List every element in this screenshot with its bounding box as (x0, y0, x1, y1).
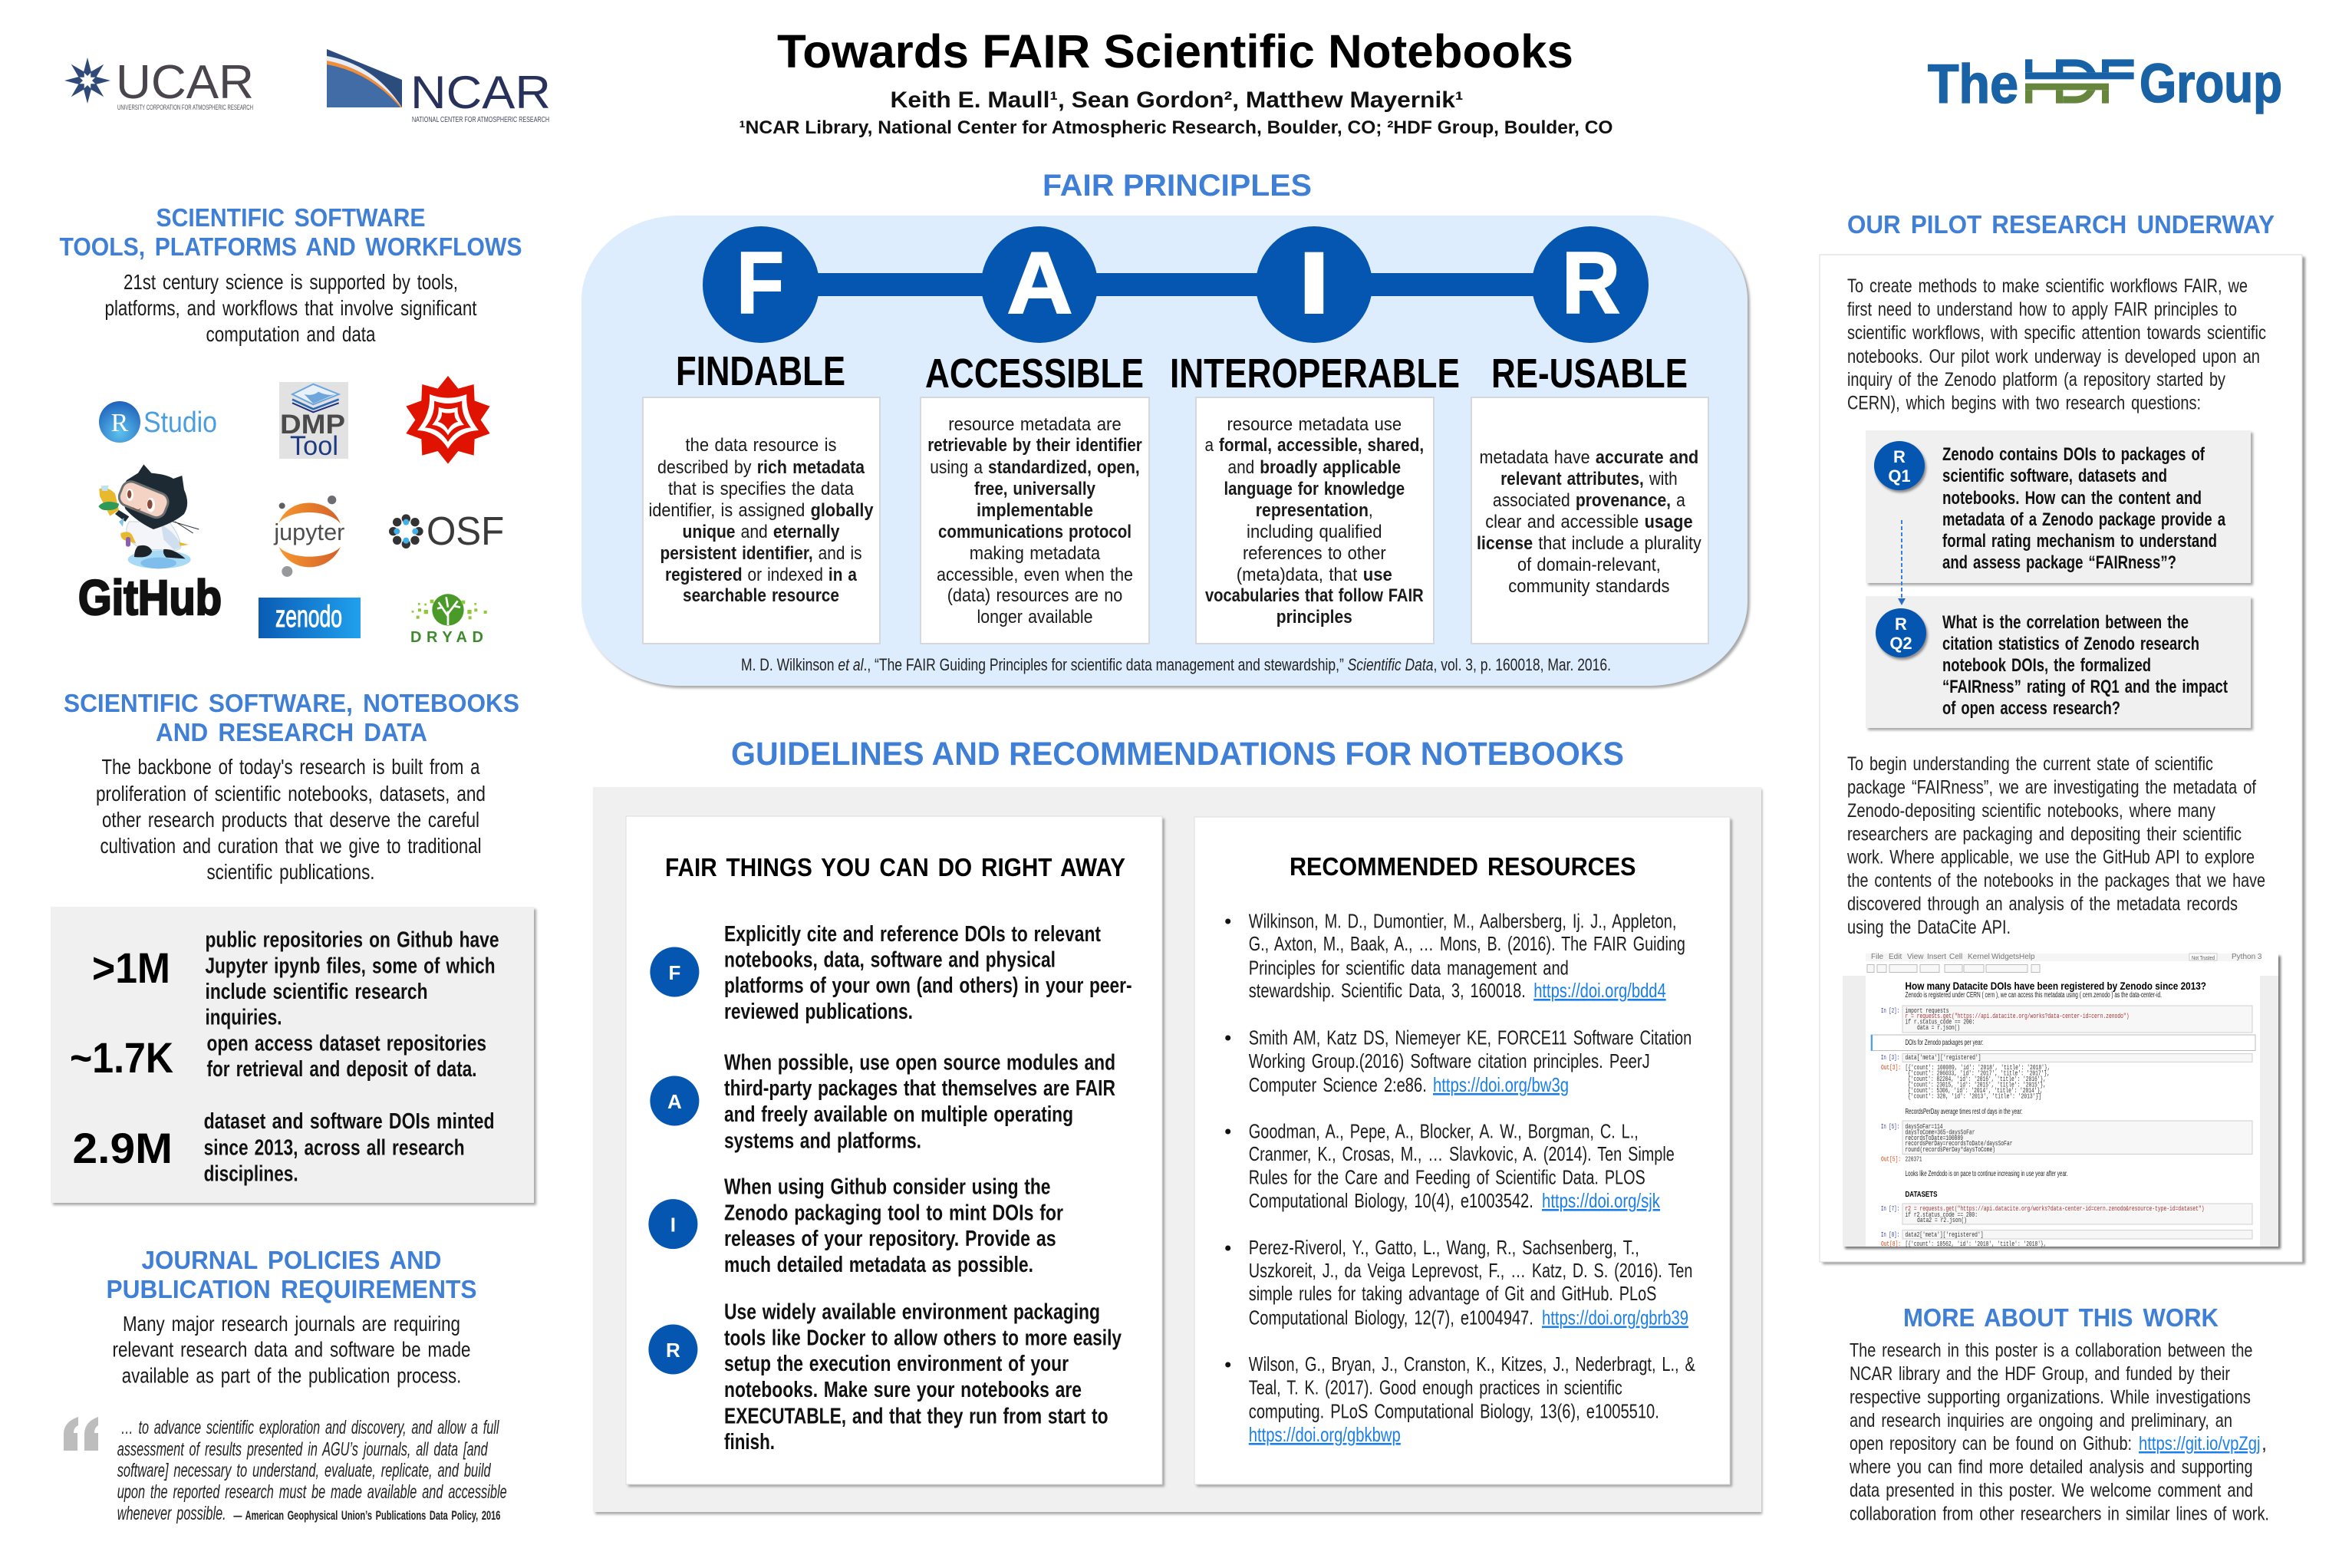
column: re-usable: relevant attributes, with (1500, 469, 1678, 489)
logo: DMPTool: Tool (290, 431, 338, 461)
callout: research question 1: formal rating mechanism to understand (1942, 531, 2217, 552)
text: pilot method: package “FAIRness”, we are investigating the metadata of (1847, 776, 2256, 798)
screenshot: Jupyter notebook: r = requests.get("https://api.datacite.org/works?data-center-id=cern.zenodo") (1906, 1013, 2130, 1020)
screenshot: Jupyter notebook: In [8]: (1881, 1231, 1899, 1239)
guideline: R: notebooks. Make sure your notebooks are (724, 1378, 1082, 1402)
reference: Wilson: https://doi.org/gbkbwp (1249, 1423, 1401, 1446)
stat: 2.9M DOIs: 2.9M (72, 1124, 173, 1172)
column: findable (643, 348, 880, 644)
column: interoperable: resource metadata use (1227, 414, 1402, 435)
title: Towards FAIR Scientific Notebooks (777, 25, 1573, 77)
logo: The HDF Group: The (1928, 54, 2018, 115)
panel: pilot research (1820, 255, 2305, 1264)
screenshot: Jupyter notebook: {'count': 23015, 'id': '2015', 'title': '2015'}, (1908, 1082, 2046, 1089)
reference: Perez-Riverol (1225, 1236, 1692, 1329)
column: interoperable: a formal, accessible, shared, (1204, 435, 1424, 456)
screenshot: Jupyter notebook: data = r.json() (1917, 1024, 1960, 1032)
authors: Keith E. Maull¹, Sean Gordon², Matthew Mayernik¹ (890, 87, 1464, 113)
column: interoperable: and broadly applicable (1228, 457, 1401, 478)
text: pilot intro: first need to understand how to apply FAIR principles to (1847, 299, 2237, 321)
quote: AGU policy: whenever possible. (117, 1503, 226, 1524)
diagram: FAIR connected circles (703, 226, 1649, 343)
reference: Goodman: Goodman, A., Pepe, A., Blocker, A. W., Borgman, C. L., (1249, 1120, 1639, 1143)
screenshot: Jupyter notebook: File (1871, 953, 1884, 961)
reference: Wilkinson: G., Axton, M., Baak, A., … Mons, B. (2016). The FAIR Guiding (1249, 932, 1685, 955)
screenshot: Jupyter notebook: Help (2019, 953, 2035, 961)
column: accessible: communications protocol (938, 522, 1132, 542)
column: interoperable: principles (1276, 607, 1352, 628)
quote: AGU policy: upon the reported research must be made available and accessible (117, 1481, 507, 1503)
callout: research question 2: citation statistics of Zenodo research (1942, 634, 2199, 654)
stat: over 1M repositories: public repositories on Github have (206, 928, 499, 953)
column: re-usable: RE-USABLE (1491, 351, 1688, 397)
screenshot: Jupyter notebook: DOIs for Zenodo packages per year: (1906, 1039, 1984, 1047)
screenshot: Jupyter notebook: {'count': 5306, 'id': '2014', 'title': '2014'}, (1908, 1087, 2043, 1095)
column: re-usable: license that include a plurality (1477, 533, 1701, 554)
logo: Dryad (410, 594, 487, 646)
logo: GitHub with octocat (78, 464, 222, 625)
stat: 1.7K dataset repositories: ~1.7K (70, 1033, 173, 1082)
guideline: R (648, 1300, 1122, 1454)
text: notebooks intro: scientific publications. (207, 860, 374, 884)
callout: research question 1: R (1893, 447, 1906, 466)
logo: RStudio (99, 401, 217, 443)
logo: GitHub with octocat: GitHub (78, 570, 222, 625)
reference: Goodman: Rules for the Care and Feeding of Scientific Data. PLOS (1249, 1166, 1645, 1189)
screenshot: Jupyter notebook: DOIs for Zenodo packages per year: (1906, 1039, 1984, 1047)
callout: research question 1: Q1 (1888, 466, 1911, 486)
text: notebooks intro: cultivation and curation that we give to traditional (100, 834, 482, 858)
logo: RStudio: R (111, 409, 129, 437)
reference: Perez-Riverol: Uszkoreit, J., da Veiga Leprevost, F., … Katz, D. S. (2016). Ten (1249, 1259, 1692, 1282)
stat: over 1M repositories (92, 928, 499, 1029)
reference: Smith: Computer Science 2:e86. (1249, 1073, 1427, 1096)
guideline: F: F (668, 961, 680, 984)
screenshot: Jupyter notebook: daysSoFar=114 (1906, 1123, 1942, 1131)
guideline: A: systems and platforms. (724, 1129, 921, 1154)
text: more about this work: data presented in this poster. We welcome comment and (1850, 1480, 2253, 1501)
text: tools intro: computation and data (206, 322, 376, 346)
text: more about this work: where you can find more detailed analysis and supporting (1849, 1456, 2252, 1477)
text: pilot intro: notebooks. Our pilot work underway is developed upon an (1847, 346, 2260, 367)
screenshot: Jupyter notebook: Out[3]: (1881, 1064, 1901, 1072)
guideline: A: and freely available on multiple operating (724, 1102, 1073, 1127)
guideline: F: Explicitly cite and reference DOIs to relevant (724, 922, 1101, 947)
screenshot: Jupyter notebook: In [5]: (1881, 1123, 1899, 1131)
callout: research question 1: metadata of a Zenodo package provide a (1942, 509, 2225, 530)
column: re-usable: associated provenance, a (1493, 490, 1685, 511)
stat: 1.7K dataset repositories (70, 1031, 486, 1082)
guideline: A (650, 1051, 1115, 1154)
callout: research question 2: of open access research? (1942, 698, 2120, 719)
text: tools intro: platforms, and workflows that involve significant (104, 296, 477, 320)
text: pilot method: discovered through an analysis of the metadata records (1847, 893, 2238, 914)
text: notebooks intro: proliferation of scientific notebooks, datasets, and (96, 782, 486, 805)
column: findable: registered or indexed in a (665, 565, 858, 585)
callout: research question 2: “FAIRness” rating of RQ1 and the impact (1942, 677, 2228, 697)
text: journal intro: available as part of the publication process. (122, 1364, 461, 1387)
guideline: I: much detailed metadata as possible. (724, 1253, 1033, 1277)
panel: guidelines and recommendations (593, 787, 1762, 1514)
citation: Wilkinson et al: M. D. Wilkinson et al., “The FAIR Guiding Principles for scientific data management and stewardship,” Scientific Data, vol. 3, p. 160018, Mar. 2016. (741, 655, 1611, 674)
diagram: FAIR connected circles: R (1562, 235, 1620, 332)
column: accessible: free, universally (974, 479, 1096, 499)
screenshot: Jupyter notebook: if r2.status_code == 200: (1906, 1211, 1978, 1219)
screenshot: Jupyter notebook: recordsToDate=100089 (1906, 1135, 1963, 1142)
heading: journal policies (106, 1246, 477, 1303)
column: findable: persistent identifier, and is (660, 543, 862, 564)
callout: research question 2: What is the correlation between the (1942, 612, 2189, 633)
stat: 2.9M DOIs: dataset and software DOIs minted (204, 1109, 495, 1134)
column: accessible: (data) resources are no (947, 585, 1122, 606)
callout: research question 2: notebook DOIs, the formalized (1942, 655, 2151, 676)
logo: NCAR: NCAR (410, 67, 551, 118)
icon: quotation mark (64, 1417, 98, 1451)
column: accessible: accessible, even when the (937, 565, 1133, 585)
column: re-usable (1471, 351, 1708, 644)
heading: guidelines: GUIDELINES AND RECOMMENDATIONS FOR NOTEBOOKS (731, 736, 1624, 772)
panel: journal policies (64, 1246, 507, 1524)
column: interoperable: (meta)data, that use (1237, 565, 1392, 585)
screenshot: Jupyter notebook: daysToCome=365-daysSoFar (1906, 1128, 1975, 1136)
logo: Wolfram star (406, 376, 490, 464)
column: accessible: using a standardized, open, (930, 457, 1140, 478)
text: pilot method: researchers are packaging and depositing their scientific (1847, 824, 2242, 845)
column: re-usable: clear and accessible usage (1485, 512, 1693, 532)
reference: Smith (1225, 1026, 1692, 1096)
reference: Wilkinson: stewardship. Scientific Data, 3, 160018. (1249, 979, 1526, 1002)
text: journal intro: Many major research journals are requiring (123, 1312, 460, 1336)
stat: 1.7K dataset repositories: for retrieval and deposit of data. (207, 1057, 477, 1082)
stat: 2.9M DOIs: disciplines. (204, 1161, 298, 1186)
screenshot: Jupyter notebook: data['meta']['registered'] (1906, 1054, 1981, 1062)
column: interoperable: vocabularies that follow FAIR (1205, 585, 1424, 606)
reference: Perez-Riverol: Computational Biology, 12(7), e1004947. (1249, 1306, 1533, 1329)
card: FAIR things you can do right away (626, 816, 1164, 1487)
card heading: RECOMMENDED RESOURCES (1290, 852, 1636, 881)
screenshot: Jupyter notebook (1843, 953, 2281, 1249)
logo: NCAR (327, 49, 551, 124)
affiliations: ¹NCAR Library, National Center for Atmospheric Research, Boulder, CO; ²HDF Group, Boulder, CO (740, 117, 1612, 138)
column: re-usable: metadata have accurate and (1480, 447, 1698, 468)
screenshot: Jupyter notebook: How many Datacite DOIs have been registered by Zenodo since 2013? (1906, 980, 2206, 992)
logo: Zenodo (259, 598, 361, 638)
text: more about this work: open repository can be found on Github: (1850, 1433, 2132, 1454)
screenshot: Jupyter notebook: Zenodo is registered under CERN ( cern ), we can access this metadata using ( cern.zenodo ) as the data-center-id. (1906, 991, 2162, 1000)
screenshot: Jupyter notebook: data2 = r2.json() (1917, 1217, 1967, 1224)
guideline: I (648, 1175, 1063, 1277)
guideline: R: setup the execution environment of your (724, 1352, 1069, 1376)
screenshot: Jupyter notebook: Edit (1889, 953, 1902, 961)
logo: The HDF Group: Group (2140, 54, 2282, 114)
panel: statistics (51, 907, 536, 1205)
callout: research question 1: and assess package “FAIRness”? (1942, 552, 2176, 573)
screenshot: Jupyter notebook: Looks like Zendodo is on pace to continue increasing in use year after year. (1906, 1170, 2068, 1178)
column: accessible: resource metadata are (948, 414, 1122, 435)
stat: over 1M repositories: Jupyter ipynb files, some of which (206, 954, 496, 979)
column: interoperable: INTEROPERABLE (1170, 351, 1460, 397)
column: interoperable: language for knowledge (1224, 479, 1405, 499)
guideline: F: platforms of your own (and others) in your peer- (724, 973, 1132, 998)
reference: Goodman: https://doi.org/sjk (1542, 1189, 1661, 1212)
screenshot: Jupyter notebook: r2 = requests.get("https://api.datacite.org/works?data-center-id=cern.zenodo&resource-type-id=dataset") (1906, 1205, 2205, 1213)
column: re-usable: of domain-relevant, (1517, 555, 1661, 575)
screenshot: Jupyter notebook: data2['meta']['registered'] (1906, 1231, 1984, 1239)
column: re-usable: community standards (1508, 576, 1669, 597)
logo: DMPTool: DMP (280, 410, 345, 440)
reference: Wilson: computing. PLoS Computational Biology, 13(6), e1005510. (1249, 1399, 1659, 1422)
panel: notebooks and research data (51, 689, 536, 1205)
text: more about this work: NCAR library and the HDF Group, and funded by their (1850, 1363, 2230, 1385)
heading: notebooks: SCIENTIFIC SOFTWARE, NOTEBOOKS (64, 689, 519, 717)
screenshot: Jupyter notebook: In [2]: (1881, 1007, 1899, 1015)
text: journal intro: relevant research data and software be made (112, 1338, 471, 1361)
guideline: F (650, 922, 1132, 1024)
logo: DMPTool (279, 382, 348, 461)
callout: research question 2: R (1895, 614, 1907, 634)
reference: Goodman: Cranmer, K., Crosas, M., … Slavkovic, A. (2014). Ten Simple (1249, 1142, 1675, 1165)
screenshot: Jupyter notebook: Python 3 (2232, 953, 2262, 961)
text: pilot intro: To create methods to make scientific workflows FAIR, we (1847, 275, 2248, 297)
screenshot: Jupyter notebook: Out[8]: (1881, 1240, 1901, 1248)
screenshot: Jupyter notebook: RecordsPerDay average times rest of days in the year: (1906, 1108, 2022, 1116)
column: accessible: longer available (977, 607, 1092, 628)
callout: research question 2: Q2 (1889, 634, 1912, 653)
logo: RStudio: Studio (143, 407, 217, 439)
stat: over 1M repositories: include scientific research (206, 980, 428, 1004)
guideline: R: R (666, 1339, 680, 1362)
guideline: I: I (670, 1214, 676, 1237)
heading: tools (60, 203, 522, 261)
quote: AGU policy: assessment of results presented in AGU’s journals, all data [and (117, 1439, 488, 1461)
screenshot: Jupyter notebook: Kernel (1968, 953, 1990, 961)
guideline: R: Use widely available environment packaging (724, 1300, 1100, 1324)
logo: UCAR: UCAR (116, 56, 254, 109)
logo: Jupyter: jupyter (273, 519, 344, 545)
screenshot: Jupyter notebook: [{'count': 10562, 'id': '2018', 'title': '2018'}, (1906, 1240, 2047, 1248)
column: interoperable: including qualified (1247, 522, 1382, 542)
screenshot: Jupyter notebook: In [3]: (1881, 1054, 1899, 1062)
text: tools intro: 21st century science is supported by tools, (124, 270, 458, 294)
quote: AGU policy: … to advance scientific exploration and discovery, and allow a full (121, 1417, 499, 1438)
column: interoperable (1170, 351, 1460, 644)
reference: Wilkinson: Wilkinson, M. D., Dumontier, M., Aalbersberg, Ij. J., Appleton, (1249, 910, 1676, 933)
guideline: R: EXECUTABLE, and that they run from start to (724, 1404, 1108, 1428)
text: pilot method: Zenodo-depositing scientific notebooks, where many (1847, 800, 2215, 822)
screenshot: Jupyter notebook: {'count': 328, 'id': '2013', 'title': '2013'}] (1908, 1092, 2041, 1100)
text: tools intro (104, 270, 477, 346)
logo: NCAR: NATIONAL CENTER FOR ATMOSPHERIC RESEARCH (412, 116, 549, 124)
heading: more about this work: MORE ABOUT THIS WORK (1903, 1303, 2219, 1332)
panel: FAIR principles (581, 216, 1750, 688)
callout: research question 1: notebooks. How can the content and (1942, 488, 2202, 509)
screenshot: Jupyter notebook: recordsPerDay=recordsToDate/daysSoFar (1906, 1140, 2013, 1148)
column: findable: described by rich metadata (657, 457, 865, 478)
column: accessible: retrievable by their identifier (927, 435, 1142, 456)
heading: FAIR principles: FAIR PRINCIPLES (1043, 169, 1312, 203)
callout: research question 1: scientific software, datasets and (1942, 466, 2167, 486)
logo: The HDF Group (1928, 54, 2282, 115)
text: pilot method: using the DataCite API. (1847, 917, 2011, 938)
guideline: A: A (667, 1090, 682, 1113)
column: accessible: implementable (977, 500, 1093, 521)
reference: Perez-Riverol: Perez-Riverol, Y., Gatto, L., Wang, R., Sachsenberg, T., (1249, 1236, 1639, 1259)
column: accessible: ACCESSIBLE (925, 351, 1144, 397)
stat: 2.9M DOIs (72, 1109, 495, 1186)
text: pilot intro: CERN), which begins with two research questions: (1847, 393, 2201, 414)
callout: research question 2 (1866, 596, 2253, 730)
guideline: A: third-party packages that themselves are FAIR (724, 1076, 1115, 1101)
logo: UCAR (64, 56, 254, 111)
text: more about this work: respective supporting organizations. While investigations (1850, 1387, 2251, 1408)
panel: scientific software tools (60, 203, 522, 646)
logo: Zenodo: zenodo (275, 600, 342, 634)
text: notebooks intro: The backbone of today's research is built from a (101, 755, 480, 779)
column: interoperable: representation, (1256, 500, 1373, 521)
logo: Dryad: DRYAD (410, 629, 483, 646)
reference: Perez-Riverol: https://doi.org/gbrb39 (1542, 1306, 1688, 1329)
logo: OSF (389, 509, 504, 554)
guideline: R: finish. (724, 1430, 775, 1454)
callout: research question 1 (1866, 430, 2253, 585)
text: pilot intro: inquiry of the Zenodo platform (a repository started by (1847, 369, 2225, 390)
reference: Wilson: Teal, T. K. (2017). Good enough practices in scientific (1249, 1376, 1622, 1399)
text: pilot method: work. Where applicable, we use the GitHub API to explore (1846, 847, 2255, 868)
screenshot: Jupyter notebook: {'count': 82204, 'id': '2016', 'title': '2016'}, (1908, 1076, 2046, 1083)
logo: Jupyter (273, 496, 344, 577)
screenshot: Jupyter notebook: Insert (1927, 953, 1946, 961)
quote: AGU policy: — American Geophysical Union’s Publications Data Policy, 2016 (233, 1508, 500, 1523)
stat: over 1M repositories: inquiries. (206, 1005, 282, 1029)
reference: Wilkinson (1225, 910, 1685, 1002)
screenshot: Jupyter notebook: [{'count': 100089, 'id': '2018', 'title': '2018'}, (1906, 1064, 2050, 1072)
screenshot: Jupyter notebook: Widgets (1991, 953, 2019, 961)
screenshot: Jupyter notebook: In [7]: (1881, 1205, 1899, 1213)
screenshot: Jupyter notebook: View (1907, 953, 1924, 961)
screenshot: Jupyter notebook: 220371 (1906, 1156, 1922, 1164)
screenshot: Jupyter notebook: round(recordsPerDay*daysToCome) (1906, 1146, 1995, 1154)
text: pilot method (1846, 753, 2265, 938)
column: findable: unique and eternally (683, 522, 840, 542)
heading: notebooks (64, 689, 519, 746)
diagram: FAIR connected circles: I (1298, 235, 1330, 332)
reference: Goodman: Computational Biology, 10(4), e1003542. (1249, 1189, 1533, 1212)
column: interoperable: references to other (1243, 543, 1386, 564)
heading: notebooks: AND RESEARCH DATA (156, 718, 427, 746)
reference: Wilson: Wilson, G., Bryan, J., Cranston, K., Kitzes, J., Nederbragt, L., & (1249, 1352, 1695, 1375)
text: more about this work (1849, 1339, 2269, 1525)
guideline: I: releases of your repository. Provide as (724, 1227, 1056, 1251)
stat: over 1M repositories: >1M (92, 944, 170, 992)
column: findable: identifier, is assigned globally (649, 500, 874, 521)
reference: Goodman (1225, 1120, 1675, 1212)
column: accessible (921, 351, 1149, 644)
arrow: RQ1 to RQ2 (1898, 520, 1906, 605)
heading: tools: SCIENTIFIC SOFTWARE (156, 203, 425, 232)
icon: octocat scientist (98, 464, 199, 568)
logo: UCAR: UNIVERSITY CORPORATION FOR ATMOSPHERIC RESEARCH (117, 104, 253, 111)
screenshot: Jupyter notebook: Not Trusted (2192, 956, 2215, 961)
text: journal intro (112, 1312, 471, 1387)
reference: Perez-Riverol: simple rules for taking advantage of Git and GitHub. PLoS (1249, 1282, 1656, 1305)
panel: more about this work (1849, 1303, 2269, 1525)
diagram: FAIR connected circles: A (1006, 235, 1072, 332)
heading: tools: TOOLS, PLATFORMS AND WORKFLOWS (60, 232, 522, 261)
screenshot: Jupyter notebook: import requests (1906, 1007, 1948, 1015)
heading: pilot research: OUR PILOT RESEARCH UNDERWAY (1847, 210, 2275, 239)
card heading: FAIR THINGS YOU CAN DO RIGHT AWAY (665, 853, 1125, 881)
screenshot: Jupyter notebook: Out[5]: (1881, 1156, 1901, 1164)
column: findable: searchable resource (683, 585, 839, 606)
quote: AGU policy: software] necessary to understand, evaluate, replicate, and build (117, 1460, 491, 1481)
reference: Smith: https://doi.org/bw3g (1433, 1073, 1569, 1096)
diagram: FAIR connected circles: F (736, 235, 784, 332)
card: recommended resources (1194, 817, 1732, 1487)
column: findable: that is specifies the data (668, 479, 855, 499)
guideline: I: When using Github consider using the (724, 1175, 1051, 1200)
stat: 2.9M DOIs: since 2013, across all research (204, 1135, 465, 1160)
guideline: F: notebooks, data, software and physical (724, 948, 1056, 973)
screenshot: Jupyter notebook: if r.status_code == 200: (1906, 1019, 1975, 1026)
callout: research question 1: Zenodo contains DOIs to packages of (1942, 444, 2205, 465)
text: pilot intro (1847, 275, 2266, 414)
heading: journal policies: PUBLICATION REQUIREMENTS (106, 1275, 477, 1303)
reference: Wilkinson: https://doi.org/bdd4 (1533, 979, 1666, 1002)
column: findable: FINDABLE (676, 348, 845, 394)
quote: AGU policy (117, 1417, 507, 1524)
screenshot: Jupyter notebook: {'count': 206033, 'id': '2017', 'title': '2017'}, (1908, 1069, 2050, 1077)
text: notebooks intro (96, 755, 486, 884)
text: more about this work: https://git.io/vpZgj (2139, 1433, 2260, 1454)
reference: Wilkinson: Principles for scientific data management and (1249, 956, 1569, 979)
reference: Smith: Smith AM, Katz DS, Niemeyer KE, FORCE11 Software Citation (1249, 1026, 1692, 1049)
text: more about this work: , (2261, 1433, 2267, 1454)
text: notebooks intro: other research products that deserve the careful (102, 808, 479, 832)
guideline: I: Zenodo packaging tool to mint DOIs for (724, 1201, 1063, 1226)
reference: Smith: Working Group.(2016) Software citation principles. PeerJ (1249, 1049, 1650, 1072)
guideline: R: tools like Docker to allow others to more easily (724, 1326, 1122, 1350)
screenshot: Jupyter notebook: DATASETS (1906, 1191, 1938, 1199)
heading: journal policies: JOURNAL POLICIES AND (141, 1246, 442, 1274)
logo: OSF: OSF (427, 509, 504, 554)
text: more about this work: and research inquiries are ongoing and preliminary, an (1850, 1410, 2232, 1431)
text: pilot method: To begin understanding the current state of scientific (1847, 753, 2213, 775)
column: findable: the data resource is (686, 435, 836, 456)
reference: Wilson (1225, 1352, 1695, 1446)
column: accessible: making metadata (970, 543, 1101, 564)
stat: 1.7K dataset repositories: open access dataset repositories (207, 1031, 486, 1056)
guideline: A: When possible, use open source modules and (724, 1051, 1115, 1076)
text: more about this work: The research in this poster is a collaboration between the (1850, 1339, 2252, 1361)
screenshot: Jupyter notebook: Cell (1949, 953, 1962, 961)
guideline: F: reviewed publications. (724, 1000, 913, 1024)
